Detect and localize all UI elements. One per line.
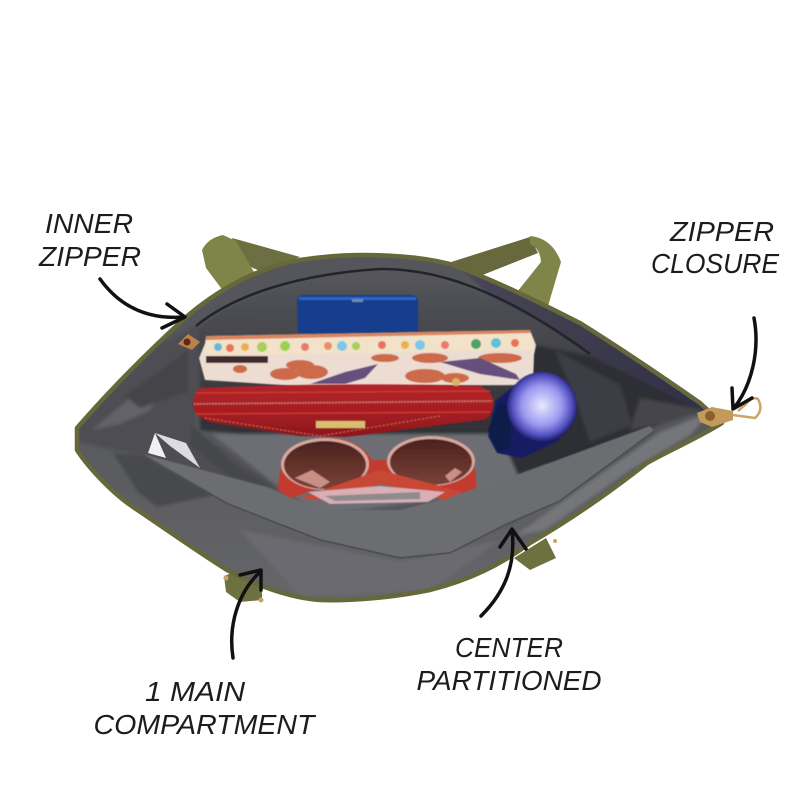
- lower centre lightening: [244, 532, 492, 561]
- inner zipper line: [196, 269, 590, 354]
- spine orange border: [206, 330, 531, 340]
- partition band: [143, 426, 654, 557]
- lining shapes: [80, 272, 704, 598]
- left silk lining: [80, 328, 248, 474]
- right cavity: [512, 345, 691, 474]
- label: center: CENTER: [455, 632, 563, 663]
- quilted lining: [212, 434, 520, 515]
- lower compartment: [80, 443, 613, 598]
- zipper trim: [77, 255, 722, 600]
- left silk highlight: [94, 399, 153, 430]
- icon: red wallet: [193, 378, 493, 437]
- left silk shadow: [128, 354, 186, 408]
- icon: floral notebook: [199, 330, 536, 386]
- spine flowers: [214, 338, 519, 352]
- label: inner: INNER: [45, 208, 133, 239]
- dark silk beside quilt: [193, 428, 262, 484]
- cover header strip: [206, 356, 268, 363]
- upper flap band left: [60, 240, 470, 360]
- arrow: main compartment: [232, 570, 261, 658]
- label: zipper: ZIPPER: [38, 241, 141, 272]
- bag interior: [80, 268, 704, 598]
- icon: left bag handle: [202, 235, 300, 292]
- icon: side strap tabs: [224, 538, 557, 602]
- cover birds: [310, 358, 520, 384]
- label: compartment: COMPARTMENT: [94, 709, 316, 740]
- arrow: center partitioned: [481, 529, 526, 616]
- back wall: [198, 298, 576, 462]
- cover blossoms: [233, 353, 522, 383]
- arrow: zipper closure: [732, 318, 756, 409]
- right lower lining: [515, 412, 710, 536]
- icon: inner zipper pull: [178, 334, 200, 350]
- icon: right bag handle: [448, 236, 561, 306]
- arrow: inner zipper: [100, 279, 185, 328]
- right silk fold: [555, 350, 632, 442]
- icon: blue case: [297, 295, 418, 333]
- label: zipper closure line 2: CLOSURE: [651, 248, 779, 279]
- notebook spine: [203, 331, 535, 356]
- icon: blue bottle: [488, 372, 577, 458]
- bag body: [77, 255, 722, 600]
- partition dark edge: [209, 430, 654, 559]
- label: 1 main: 1 MAIN: [145, 676, 246, 707]
- left pocket shadow: [113, 453, 215, 507]
- label: partitioned: PARTITIONED: [416, 665, 602, 696]
- icon: gold zipper pull: [697, 398, 760, 427]
- left silk edge: [134, 488, 135, 489]
- label: zipper closure line 1: ZIPPER: [669, 216, 774, 247]
- right tip lining: [630, 398, 705, 430]
- icon: white tag: [148, 433, 200, 468]
- illustration: open bag: [60, 240, 760, 610]
- icon: red sunglasses: [278, 436, 476, 504]
- upper flap band right: [465, 272, 704, 412]
